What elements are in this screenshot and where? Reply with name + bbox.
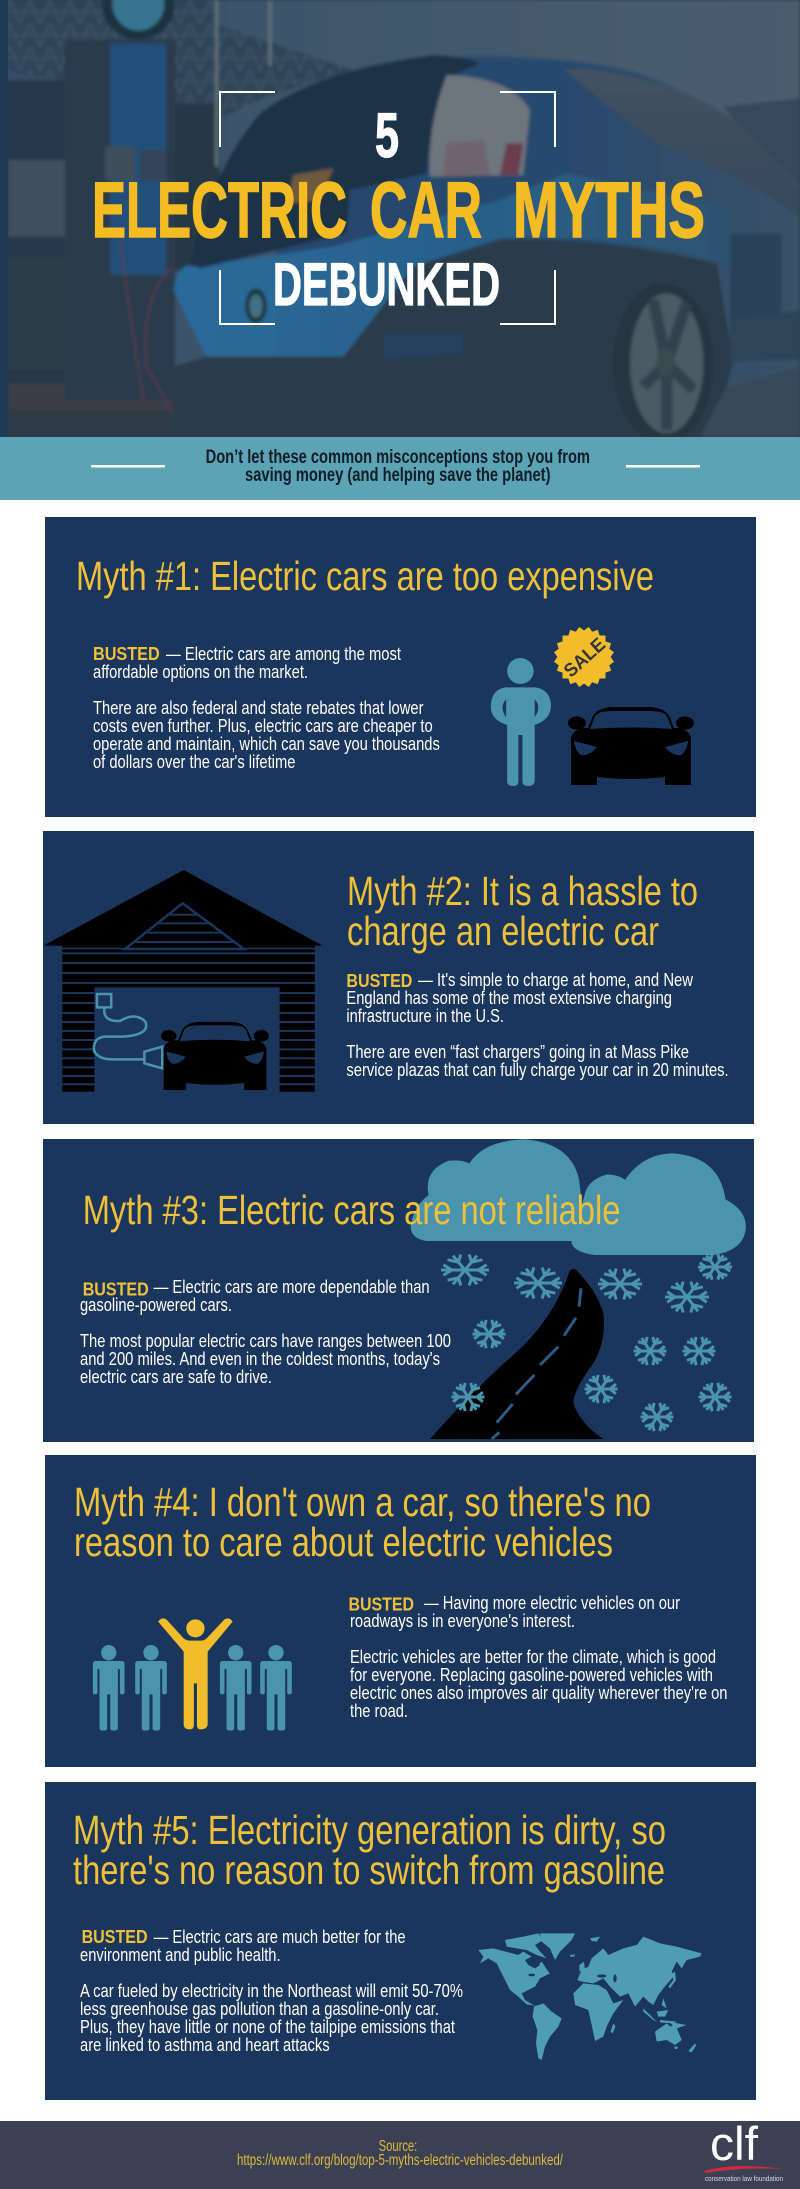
myth 4 heading [74, 1479, 651, 1565]
myth 5 body text: — Electric cars are much better for the [154, 1926, 406, 1947]
myth 4 body text: — Having more electric vehicles on our [424, 1592, 680, 1613]
icon: snowflakes [441, 1253, 732, 1432]
myth 3 body text: The most popular electric cars have ranges between 100 [80, 1330, 451, 1351]
myth 4 heading: Myth #4: I don't own a car, so there's no [74, 1479, 651, 1525]
myth 5 body text [80, 1926, 463, 2055]
title: DEBUNKED [273, 251, 500, 318]
source citation: https://www.clf.org/blog/top-5-myths-electric-vehicles-debunked/ [237, 2152, 564, 2169]
footer band [0, 2117, 800, 2189]
panel: myth 5 [45, 1782, 756, 2100]
panel: myth 4 [45, 1455, 756, 1767]
icon: sale badge: SALE [560, 634, 610, 682]
logo: conservation law foundation [704, 2117, 783, 2183]
myth 4 heading: reason to care about electric vehicles [74, 1519, 613, 1565]
myth 3 body text: BUSTED [83, 1278, 149, 1300]
myth 5 body text: less greenhouse gas pollution than a gasoline-only car. [80, 1998, 439, 2019]
source citation [237, 2138, 564, 2169]
subtitle band: saving money (and helping save the planet) [245, 465, 550, 486]
panel: myth 3 [43, 1139, 754, 1442]
myth 1 body text: There are also federal and state rebates that lower [93, 697, 424, 718]
myth 3 body text: — Electric cars are more dependable than [154, 1276, 430, 1297]
myth 5 heading [73, 1807, 666, 1893]
myth 5 body text: BUSTED [82, 1926, 148, 1947]
myth 5 body text: are linked to asthma and heart attacks [80, 2034, 330, 2055]
myth 1 body text: operate and maintain, which can save you thousands [93, 733, 440, 754]
myth 2 body text [346, 969, 729, 1080]
title: ELECTRIC [92, 165, 347, 254]
myth 1 body text: affordable options on the market. [93, 661, 308, 682]
title: 5 [375, 101, 399, 171]
myth 1 body text: — Electric cars are among the most [166, 643, 401, 664]
logo: conservation law foundation: clf [710, 2117, 759, 2170]
myth 4 body text: Electric vehicles are better for the climate, which is good [350, 1646, 716, 1667]
myth 2 heading [347, 868, 698, 954]
myth 5 body text: A car fueled by electricity in the Northeast will emit 50-70% [80, 1980, 463, 2001]
myth 2 body text: — It's simple to charge at home, and New [418, 969, 694, 990]
myth 2 body text: There are even “fast chargers” going in at Mass Pike [346, 1041, 689, 1062]
myth 3 body text: gasoline-powered cars. [80, 1294, 232, 1315]
myth 4 body text: the road. [350, 1700, 408, 1721]
icon: winding road [430, 1269, 604, 1439]
icon: person [491, 658, 551, 786]
myth 2 body text: England has some of the most extensive charging [346, 987, 672, 1008]
icon: storm cloud [411, 1139, 746, 1255]
title: CAR [370, 165, 482, 254]
myth 1 body text: costs even further. Plus, electric cars are cheaper to [93, 715, 433, 736]
myth 4 body text: BUSTED [348, 1594, 414, 1614]
myth 5 heading: Myth #5: Electricity generation is dirty, so [73, 1807, 666, 1853]
icon: group of people [93, 1618, 292, 1731]
myth 2 heading: Myth #2: It is a hassle to [347, 868, 698, 914]
myth 5 body text: Plus, they have little or none of the tailpipe emissions that [80, 2016, 455, 2037]
title frame brackets [220, 92, 555, 324]
myth 2 heading: charge an electric car [347, 908, 659, 954]
myth 2 body text: BUSTED [346, 970, 412, 991]
myth 4 body text: roadways is in everyone's interest. [350, 1610, 575, 1631]
myth 4 body text [348, 1592, 728, 1721]
myth 1 body text: BUSTED [93, 643, 160, 664]
myth 5 body text: environment and public health. [80, 1944, 281, 1965]
myth 3 body text [80, 1276, 451, 1387]
panel: myth 2 [43, 831, 754, 1124]
myth 3 body text: electric cars are safe to drive. [80, 1366, 272, 1387]
title [92, 101, 705, 318]
icon: world map [478, 1933, 702, 2060]
myth 5 heading: there's no reason to switch from gasoline [73, 1847, 665, 1893]
myth 3 body text: and 200 miles. And even in the coldest months, today's [80, 1348, 440, 1369]
myth 1 heading: Myth #1: Electric cars are too expensive [76, 553, 654, 599]
icon: garage with charger and car [43, 870, 322, 1092]
subtitle band: Don’t let these common misconceptions stop you from [206, 447, 590, 468]
myth 2 body text: infrastructure in the U.S. [346, 1005, 504, 1026]
myth 1 body text [93, 643, 440, 772]
logo: conservation law foundation: conservation law foundation [705, 2174, 783, 2183]
myth 3 heading: Myth #3: Electric cars are not reliable [83, 1187, 620, 1233]
title: MYTHS [513, 165, 705, 254]
hero photo background: electric car at charging station [0, 0, 800, 443]
myth 4 body text: for everyone. Replacing gasoline-powered vehicles with [350, 1664, 713, 1685]
subtitle band [0, 437, 800, 500]
source citation: Source: [379, 2138, 417, 2155]
panel: myth 1 [45, 517, 756, 817]
icon: car [568, 707, 694, 785]
myth 1 body text: of dollars over the car's lifetime [93, 751, 295, 772]
